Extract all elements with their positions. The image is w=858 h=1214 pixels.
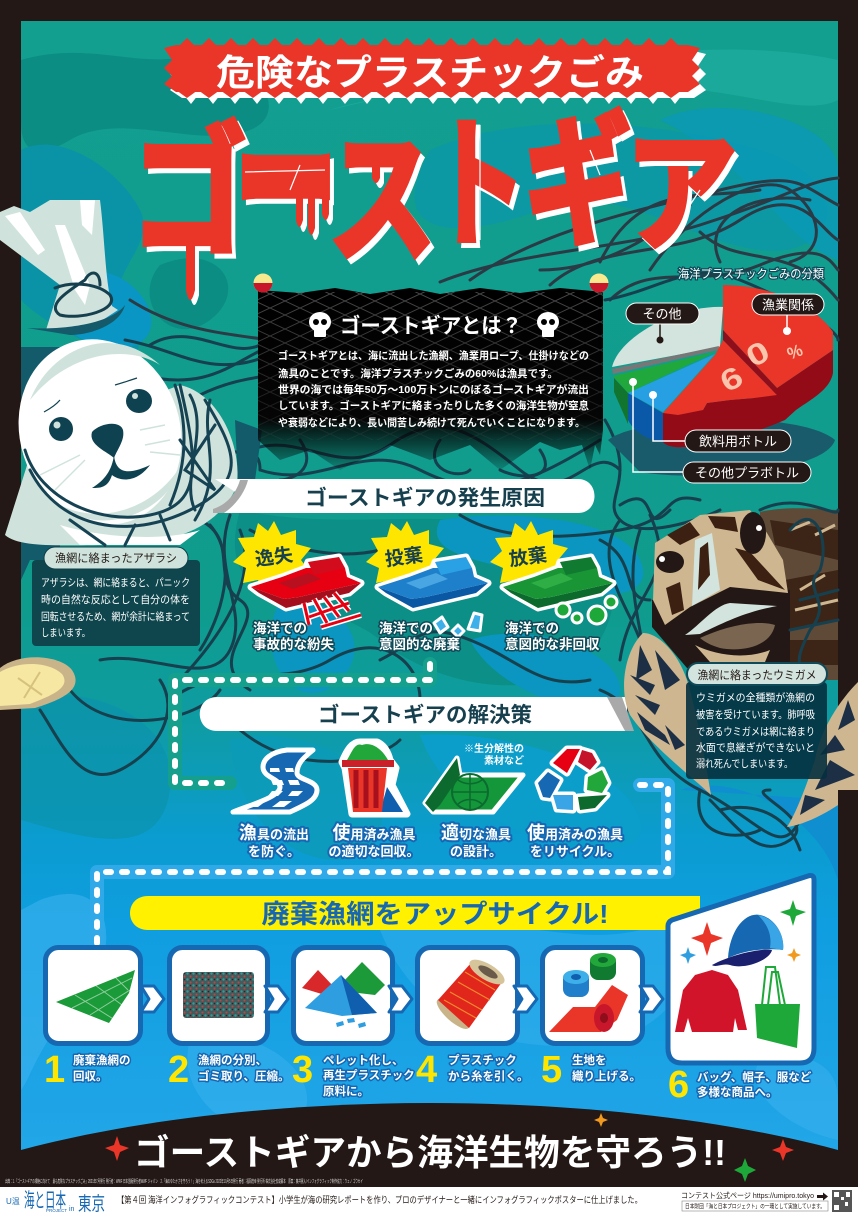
cause: intentional disposal	[366, 521, 488, 652]
footer statement: 【第４回 海洋インフォグラフィックコンテスト】小学生が海の研究レポートを作り、プロのデザイナーと一緒にインフォグラフィックポスターに仕上げました。	[117, 1194, 642, 1205]
solution: proper collection: の適切な回収。	[328, 844, 420, 859]
icon: compressed net block	[183, 972, 254, 1018]
caption	[505, 620, 600, 652]
step 1: 1	[44, 1049, 65, 1091]
step 3: 再生プラスチック	[323, 1068, 415, 1082]
yellow burst	[366, 521, 444, 595]
heading: solutions	[200, 697, 634, 731]
step 1	[44, 948, 164, 1091]
caption: 海洋での	[505, 620, 559, 636]
cause: deliberate non-recovery	[490, 521, 617, 652]
label: beverage bottles	[649, 391, 791, 452]
seal flipper caught in net	[0, 200, 125, 335]
icon: biodegradable mat	[425, 758, 523, 812]
step 5	[541, 948, 663, 1091]
footer logo: in	[69, 1206, 75, 1213]
step 4: プラスチック	[448, 1054, 517, 1067]
caption: 使用済みの漁具	[527, 823, 623, 843]
heading band: upcycle: 廃棄漁網をアップサイクル!	[262, 899, 608, 929]
yellow burst	[490, 521, 568, 595]
60% label on pie: %	[784, 340, 806, 364]
icon: thread spool	[433, 955, 508, 1033]
turtle caption	[686, 663, 827, 779]
solution: prevent outflow: を防ぐ。	[248, 844, 300, 859]
info text: 世界の海では毎年50万～100万トンにのぼるゴーストギアが流出	[278, 383, 589, 396]
icon: pellet piles	[302, 962, 385, 1028]
caption: 漁具の流出	[239, 823, 309, 843]
heading: ゴーストギアとは？	[340, 314, 522, 338]
title: ghost gear: ギ	[527, 108, 636, 267]
banner: dangerous plastic waste	[164, 38, 706, 104]
step 2: 漁網の分別、	[198, 1053, 267, 1067]
solution: recycle	[527, 749, 623, 859]
caption	[253, 620, 334, 652]
seal	[0, 318, 262, 580]
heading: causes of ghost gear: ゴーストギアの発生原因	[305, 486, 545, 510]
title: ghost gear: ア	[625, 121, 737, 267]
turtle caption body	[696, 691, 815, 770]
heading band: upcycle	[130, 896, 700, 930]
label: other	[626, 303, 699, 344]
seal caption body: 回転させるため、網が余計に絡まって	[41, 610, 190, 623]
step 1: 廃棄漁網の	[73, 1053, 130, 1067]
caption: 使用済み漁具	[332, 823, 416, 843]
solution: proper design	[425, 742, 524, 859]
icon: road	[233, 750, 317, 812]
step 5: 生地を	[572, 1053, 606, 1067]
contest link	[681, 1190, 828, 1211]
note: 素材など	[484, 754, 524, 767]
info text: ゴーストギアとは、海に流出した漁網、漁業用ロープ、仕掛けなどの	[278, 349, 589, 362]
title: ghost gear: ー	[232, 21, 340, 356]
heading: causes of ghost gear	[213, 479, 594, 513]
step 3: 原料に。	[323, 1084, 369, 1098]
footer white strip	[0, 1187, 858, 1214]
step 5: 5	[541, 1049, 562, 1091]
heading: solutions: ゴーストギアの解決策	[318, 703, 532, 727]
title: ghost gear: ギ	[523, 103, 632, 262]
chevron	[389, 986, 412, 1012]
title: ghost gear: ゴ	[131, 113, 247, 274]
cause: deliberate non-recovery: 放棄	[508, 544, 548, 571]
step 4: 4	[416, 1049, 437, 1091]
solution: recycle: をリサイクル。	[530, 844, 620, 859]
title: ghost gear	[131, 21, 741, 361]
title: ghost gear: ス	[332, 125, 440, 285]
step 6: 多様な商品へ。	[697, 1085, 778, 1099]
yellow burst	[233, 521, 311, 595]
caption	[379, 620, 460, 652]
caption: 海洋での	[379, 620, 433, 636]
icon: fabric rolls	[549, 953, 628, 1032]
caption: 意図的な非回収	[505, 636, 600, 652]
fishing nets background	[40, 178, 838, 850]
info text: や衰弱などにより、長い間苦しみ続けて死んでいくことになります。	[278, 416, 585, 429]
icon: tote bag	[755, 967, 800, 1048]
step 2: 2	[168, 1049, 189, 1091]
buoys	[254, 274, 608, 292]
turtle caption body: であるウミガメは網に絡まり	[696, 725, 815, 738]
label: other: その他	[642, 306, 682, 322]
dotted flow path	[97, 664, 668, 950]
turtle caption body: 被害を受けています。肺呼吸	[696, 708, 815, 721]
cause: accidental loss: 逸失	[254, 544, 294, 571]
bottom dark arc	[21, 1103, 838, 1153]
info text	[278, 349, 589, 429]
label: fishery: 漁業関係	[762, 298, 814, 312]
neck	[652, 580, 790, 668]
seal caption body: しまいます。	[41, 627, 90, 639]
step 1: 回収。	[73, 1070, 108, 1083]
icon: jacket	[675, 970, 747, 1032]
head	[653, 510, 788, 625]
contest link: コンテスト公式ページ https://umipro.tokyo	[681, 1190, 814, 1200]
turtle caption body: 水面で息継ぎができないと	[696, 741, 815, 754]
note: ※生分解性の	[464, 742, 524, 755]
solution: proper design: の設計。	[450, 844, 502, 859]
icon: red boat	[251, 557, 361, 627]
sea turtle	[624, 503, 858, 840]
info text: 漁具のことです。海洋プラスチックごみの60%は漁具です。	[278, 367, 558, 380]
footer logo: U温	[6, 1197, 20, 1206]
60% label on pie: 0	[741, 335, 775, 374]
icon: skull left	[309, 312, 331, 337]
footer logo: PROJECT	[46, 1208, 67, 1213]
icon: green net	[56, 970, 135, 1023]
title: ghost gear: ー	[236, 26, 344, 361]
cause: intentional disposal: 投棄	[384, 544, 424, 571]
right flipper	[787, 682, 858, 827]
shell	[760, 508, 838, 680]
slogan: ゴーストギアから海洋生物を守ろう!!	[134, 1132, 726, 1173]
caption: 海洋での	[253, 620, 307, 636]
seal caption body: アザラシは、網に絡まると、パニック	[41, 576, 190, 589]
step 6: バッグ、帽子、服など	[697, 1070, 812, 1084]
turtle caption: 漁網に絡まったウミガメ	[698, 668, 816, 682]
60% label on pie	[715, 335, 806, 399]
step 5: 織り上げる。	[572, 1069, 641, 1083]
turtle caption body: 溺れ死んでしまいます。	[696, 758, 793, 770]
solution: prevent outflow	[233, 750, 317, 859]
step 3: ペレット化し、	[323, 1054, 404, 1067]
label: beverage bottles: 飲料用ボトル	[699, 434, 777, 449]
note	[464, 742, 524, 767]
icon: green boat	[503, 557, 617, 624]
title: ghost gear: ト	[434, 112, 530, 269]
icon: sparkles	[680, 900, 806, 964]
eyes	[656, 551, 684, 573]
title: ghost gear: ス	[328, 120, 436, 280]
footer logo: 海と日本	[24, 1189, 66, 1212]
info text: しています。ゴーストギアに絡まったりした多くの海洋生物が窒息	[278, 399, 589, 412]
yellow seal tail	[0, 657, 76, 710]
step 3	[292, 948, 415, 1098]
chevron	[265, 986, 288, 1012]
icon: recycling arrows	[538, 749, 608, 810]
title: ghost gear: ア	[629, 126, 741, 272]
chevron	[141, 986, 164, 1012]
step 3: 3	[292, 1049, 313, 1091]
title: ghost gear: ゴ	[135, 118, 251, 279]
icon: blue boat	[378, 557, 488, 637]
cause: accidental loss	[233, 521, 361, 652]
caption: 事故的な紛失	[253, 636, 334, 652]
seal face	[40, 378, 180, 490]
label: other plastic bottles: その他プラボトル	[695, 466, 799, 480]
net on shell	[760, 503, 838, 670]
solution: proper collection	[328, 742, 420, 859]
step 6	[668, 876, 814, 1106]
credits: 出典：1.「ゴーストギアの根絶に向けて 最も危険なプラスチックごみ」2021年7月発行 発行者：WWF 日本語版発行者WWF ジャパン 2.「海のゆたかさを守ろう！」海を考えるSDGs 2022年10月5日発行 著者：福岡茂幸 発行所 株式会社佼成鋼本 原案：藤井憲ん/インフォグラフィック制作協力：ウェノ ゴウセイ	[5, 1178, 363, 1185]
left flipper	[624, 633, 711, 795]
mouth	[685, 603, 777, 635]
icon: skull right	[537, 312, 559, 337]
label: fishery	[752, 294, 824, 335]
info panel: what is ghost gear	[254, 274, 608, 470]
chart title: 海洋プラスチックごみの分類	[678, 266, 824, 281]
chevron	[514, 986, 537, 1012]
icon: trash bin	[342, 742, 407, 814]
banner text: 危険なプラスチックごみ	[216, 52, 644, 93]
icons: bottom sparkles	[105, 1113, 794, 1182]
step 6: 6	[668, 1064, 689, 1106]
chevron	[640, 986, 663, 1012]
turtle caption body: ウミガメの全種類が漁網の	[696, 691, 815, 704]
step 4: から糸を引く。	[448, 1069, 528, 1083]
60% label on pie: 6	[715, 360, 749, 399]
pie chart: marine plastic classification	[608, 266, 835, 483]
step 2: ゴミ取り、圧縮。	[198, 1069, 290, 1083]
seal caption: 漁網に絡まったアザラシ	[55, 551, 177, 565]
seal caption body	[41, 576, 190, 639]
step 2	[168, 948, 290, 1091]
step 4	[416, 948, 537, 1091]
seal caption	[32, 547, 200, 646]
seal caption body: 時の自然な反応として自分の体を	[41, 593, 190, 606]
caption: 意図的な廃棄	[379, 636, 460, 652]
label: other plastic bottles	[629, 378, 811, 483]
QR code	[832, 1190, 852, 1212]
caption: 適切な漁具	[441, 823, 511, 843]
icon: cap	[712, 915, 783, 966]
title: ghost gear: ト	[430, 107, 526, 264]
